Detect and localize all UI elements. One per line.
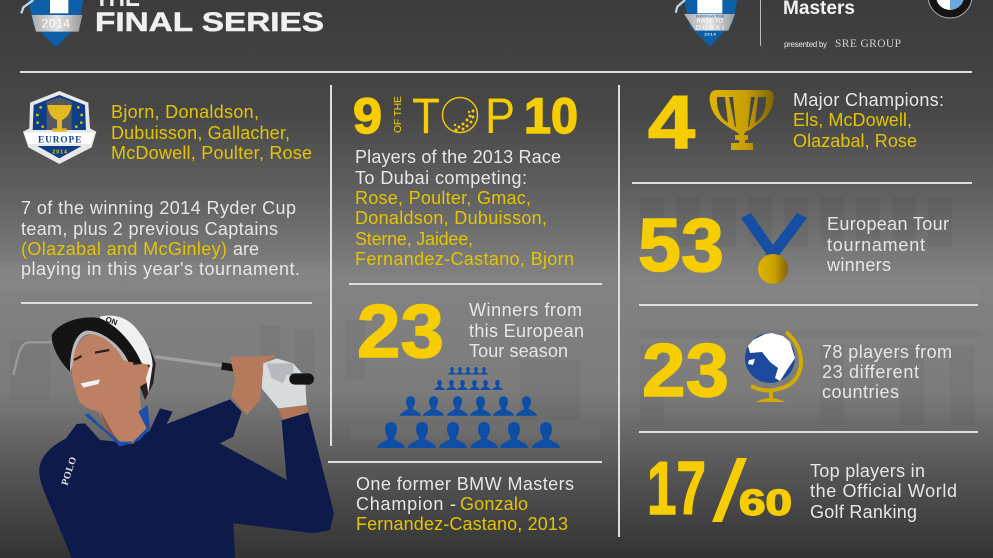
logo: Race to Dubai shield right: DUBAI [696, 24, 724, 31]
icon: Ryder Cup Europe badge: 2014 [52, 149, 67, 155]
club [13, 342, 305, 379]
illustration: golfer [13, 315, 334, 558]
panel: world ranking [647, 446, 957, 530]
text: countries: 23 different [822, 362, 919, 382]
heading: 9 of the top 10 [353, 88, 578, 144]
text: tournament winners [826, 214, 949, 275]
panel: tournament winners [638, 203, 949, 287]
panel: Ryder Cup [21, 91, 312, 279]
neck and face [72, 332, 151, 445]
text: winners: Tour season [469, 341, 568, 361]
text: Race to Dubai players: To Dubai competing: [355, 168, 527, 188]
logo: Race to Dubai shield left [21, 0, 83, 47]
text: world ranking: Top players in [810, 461, 925, 481]
text: world ranking: Golf Ranking [810, 502, 917, 522]
cap: ON [104, 315, 119, 327]
wrist [278, 405, 308, 420]
text: Race to Dubai players: Sterne, Jaidee, [355, 229, 473, 249]
BMW Masters sponsor block: SRE GROUP [835, 38, 901, 50]
icon: trophy [710, 90, 774, 150]
hands [230, 355, 277, 415]
text: former champion: Fernandez-Castano, 2013 [356, 514, 568, 534]
glove [262, 358, 307, 408]
panel: 9 of the top 10 [353, 88, 578, 269]
facial features [74, 350, 120, 443]
text: former champion: Gonzalo [460, 494, 528, 514]
text: Ryder Cup description: team, plus 2 previous Captains [21, 219, 278, 239]
text: major champions: Olazabal, Rose [793, 131, 917, 151]
icon: globe [745, 332, 801, 402]
panel: 23 winners [357, 289, 584, 448]
text: Race to Dubai players: Fernandez-Castano, Bjorn [355, 249, 574, 269]
stat: 17/60 [647, 446, 792, 530]
stat: 53: 53 [638, 203, 724, 287]
heading: 9 of the top 10: P [485, 88, 515, 144]
heading: 9 of the top 10: 9 [353, 88, 382, 144]
icon: people pyramid [377, 367, 560, 448]
icon: Ryder Cup Europe badge: EUROPE [38, 135, 81, 145]
cap [52, 315, 153, 393]
text: Ryder Cup description: (Olazabal and McGinley) [21, 239, 227, 259]
title: FINAL SERIES [95, 7, 324, 37]
text: Ryder Cup description: playing in this year's tournament. [21, 259, 300, 279]
logo: Race to Dubai shield left: 2014 [42, 17, 70, 31]
text: major champions: Major Champions: [793, 90, 944, 110]
logo: Race to Dubai shield right: RACE TO [697, 19, 724, 25]
text: countries [822, 342, 952, 402]
title [95, 0, 324, 37]
text: former champion [356, 474, 574, 534]
hair [127, 348, 156, 400]
text: tournament winners: tournament [827, 235, 925, 255]
text: Ryder Cup names [111, 102, 312, 163]
text: winners: this European [469, 321, 584, 341]
text: tournament winners: European Tour [827, 214, 949, 234]
text: Ryder Cup names: Bjorn, Donaldson, [111, 102, 259, 122]
text: Ryder Cup description: are [233, 239, 259, 259]
stat: 17/60: 17 [647, 446, 706, 530]
text: countries: 78 players from [822, 342, 952, 362]
BMW Masters sponsor block [760, 0, 901, 50]
logo: Race to Dubai shield right [676, 0, 737, 47]
logo: Race to Dubai shield right: 2014 [704, 32, 716, 37]
heading: 9 of the top 10: 10 [524, 88, 578, 144]
icon: golf ball [442, 98, 478, 132]
text: Ryder Cup names: Dubuisson, Gallacher, [111, 123, 290, 143]
text: tournament winners: winners [826, 255, 891, 275]
logo: Race to Dubai shield right: EUROPEAN TOUR [696, 14, 725, 18]
text: Race to Dubai players: Donaldson, Dubuisson, [355, 208, 547, 228]
text: world ranking [810, 461, 957, 522]
sweater [39, 399, 334, 558]
stat: 23 countries: 23 [642, 328, 729, 412]
stat: 17/60: 60 [739, 482, 792, 523]
text: Ryder Cup description: 7 of the winning 2014 Ryder Cup [21, 198, 296, 218]
text: winners: Winners from [469, 300, 582, 320]
text: major champions [793, 90, 944, 151]
text: major champions: Els, McDowell, [793, 110, 912, 130]
icon: medal [741, 213, 807, 284]
text: Ryder Cup names: McDowell, Poulter, Rose [111, 143, 312, 163]
text: Race to Dubai players [355, 147, 574, 269]
heading: 9 of the top 10: T [412, 88, 440, 144]
text: Race to Dubai players: Rose, Poulter, Gmac, [355, 188, 531, 208]
stat: 4: 4 [648, 80, 695, 164]
text: Race to Dubai players: Players of the 2013 Race [355, 147, 561, 167]
panel: major champions [648, 80, 944, 164]
shirt collar [84, 405, 150, 447]
icon: Ryder Cup Europe badge [23, 91, 96, 164]
heading: 9 of the top 10: OF THE [392, 96, 404, 133]
logo: BMW roundel [928, 0, 972, 18]
text: countries: countries [822, 382, 899, 402]
BMW Masters sponsor block: presented by [784, 40, 827, 49]
text: winners [469, 300, 584, 361]
POLO logo: POLO [60, 455, 79, 487]
stat: 23: 23 [357, 289, 444, 373]
text: former champion: One former BMW Masters [356, 474, 574, 494]
text: world ranking: the Official World [810, 481, 957, 501]
text: former champion: Champion - [356, 494, 456, 514]
text: Ryder Cup description [21, 198, 300, 279]
panel: countries [642, 328, 952, 412]
